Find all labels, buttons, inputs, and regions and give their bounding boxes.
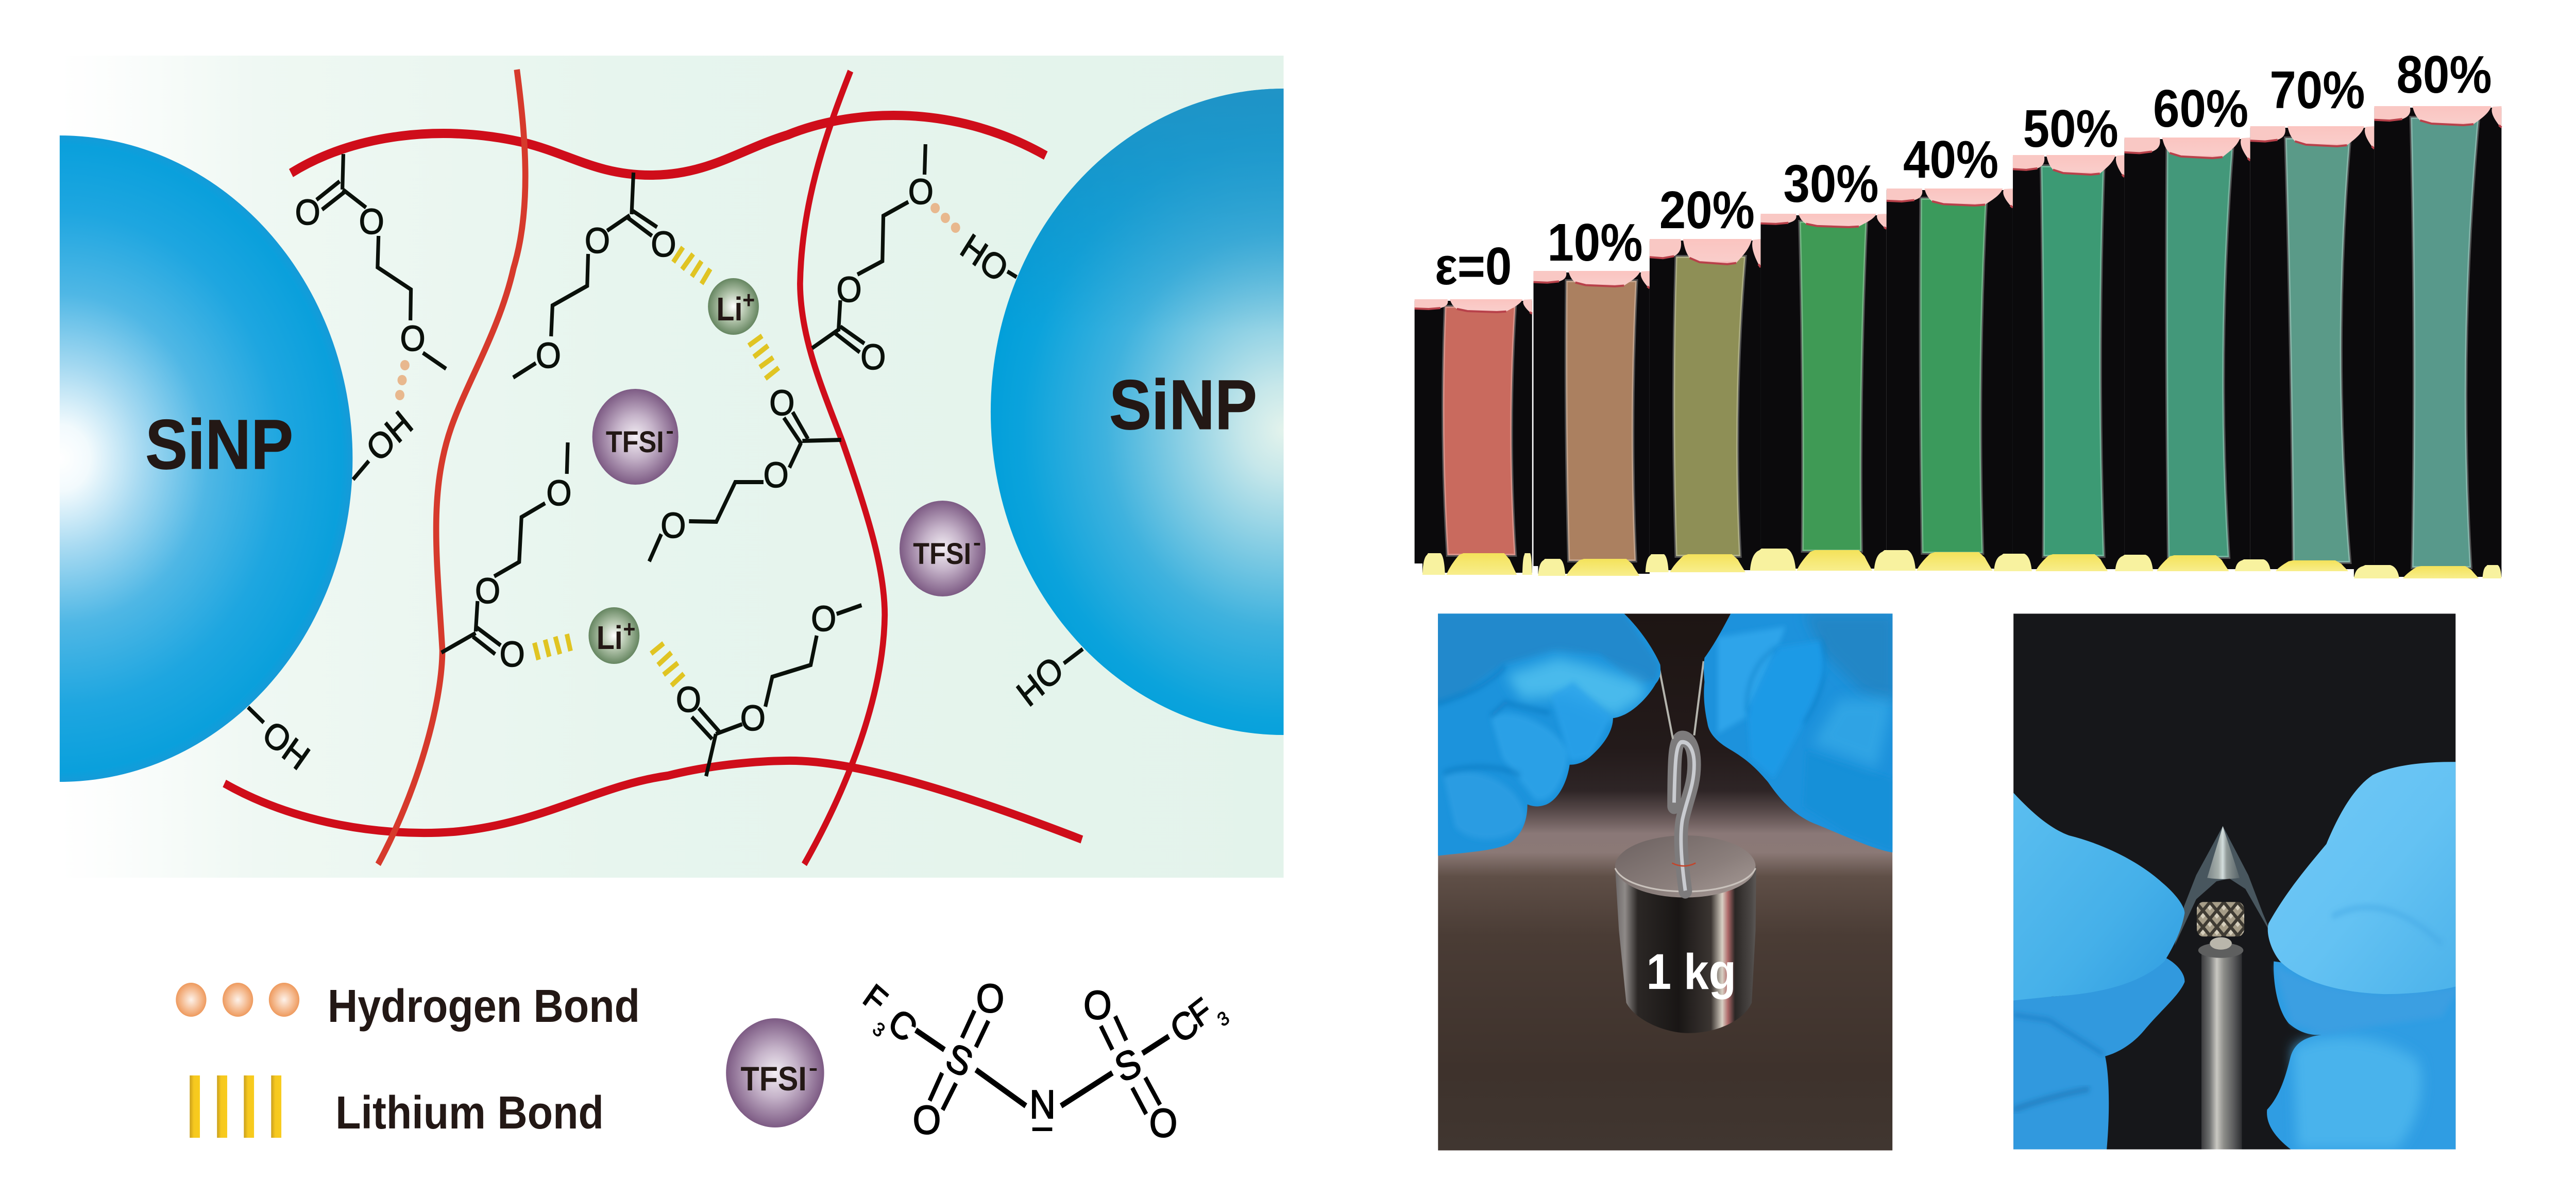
strain label 30%: 30% [1783, 153, 1879, 213]
right glove [1694, 613, 1895, 861]
legend: TFSI- ion [726, 1018, 824, 1127]
Li+ ion lower: Li [597, 619, 623, 656]
left SiNP particle [60, 135, 352, 782]
side chain: right of upper Li: O [769, 383, 794, 423]
Li+ ion lower [588, 607, 639, 664]
side chain: lower right [676, 599, 861, 776]
side chain: lower right: O [676, 680, 701, 720]
left SiNP particle: SiNP [145, 405, 293, 484]
strip 40% [1874, 189, 2013, 571]
TFSI chemical structure: O [976, 976, 1004, 1021]
TFSI- ion right: TFSI [913, 537, 971, 571]
right SiNP particle: SiNP [1109, 365, 1257, 444]
TFSI- ion right [900, 501, 986, 596]
side chain: lower left: O [500, 635, 525, 675]
Li+ ion lower: + [623, 616, 636, 643]
legend: hydrogen bond: Hydrogen Bond [328, 981, 640, 1032]
TFSI chemical structure: C [881, 1000, 924, 1050]
hydroxyl group lower left: OH [256, 713, 316, 778]
photo: film wrapping a sharp metal tip [2008, 613, 2460, 1151]
side chain: top centre [513, 173, 676, 378]
strain label 80%: 80% [2396, 44, 2492, 104]
TFSI chemical structure: 3 [1213, 1006, 1233, 1031]
legend: hydrogen bond [176, 981, 640, 1032]
TFSI chemical structure: O [913, 1098, 941, 1142]
strip 20% [1646, 239, 1760, 572]
side chain: lower left: O [547, 473, 571, 514]
Li+ ion upper: Li [716, 290, 742, 328]
side chain: right of upper Li: O [660, 506, 686, 546]
strain label 60%: 60% [2153, 78, 2248, 138]
TFSI chemical structure: F [1182, 990, 1218, 1035]
side chain: top left with hydrogen bond: OH [360, 403, 420, 469]
strip 60% [2115, 138, 2250, 571]
photo: film holding 1 kg weight [1434, 613, 1895, 1151]
TFSI- ion centre [592, 389, 679, 485]
side chain: lower left [442, 442, 571, 675]
strip 50% [1994, 155, 2124, 571]
hydroxyl group lower right: HO [1010, 649, 1071, 714]
TFSI chemical structure: S [940, 1034, 979, 1086]
right SiNP particle [991, 89, 1283, 735]
strip 70% [2235, 126, 2374, 571]
strip 30% [1750, 214, 1887, 571]
side chain: right of upper Li [649, 383, 841, 561]
side chain: top right with hydrogen bond: HO [954, 227, 1014, 290]
Li+ ion upper [708, 278, 759, 335]
strain label 70%: 70% [2269, 60, 2365, 119]
side chain: top right with hydrogen bond [812, 144, 1016, 378]
lithium bond hashes: upper [673, 247, 779, 379]
TFSI chemical structure [857, 976, 1233, 1145]
TFSI chemical structure: F [857, 977, 893, 1020]
strip ε=0 [1415, 299, 1532, 575]
weight label: 1 kg [1647, 944, 1736, 1000]
legend: lithium bond: Lithium Bond [335, 1087, 604, 1139]
film strips [1658, 661, 1704, 739]
TFSI chemical structure: N [1029, 1082, 1056, 1127]
TFSI chemical structure: O [1083, 983, 1112, 1028]
TFSI chemical structure: 3 [869, 1017, 889, 1041]
photo background [2013, 613, 2455, 1150]
side chain: lower left: O [475, 571, 500, 611]
side chain: right of upper Li: O [764, 455, 789, 495]
TFSI- ion centre: TFSI [606, 425, 664, 459]
panel background [60, 56, 1283, 878]
left glove [1434, 613, 1671, 861]
side chain: top left with hydrogen bond [295, 154, 446, 480]
strain label 20%: 20% [1659, 180, 1755, 240]
panel: strain colour photo strip [1415, 44, 2501, 578]
side chain: top left with hydrogen bond: O [295, 193, 320, 233]
side chain: top centre: O [585, 221, 610, 261]
strain label 10%: 10% [1547, 212, 1642, 272]
side chain: top left with hydrogen bond: O [400, 319, 426, 359]
1 kg weight cylinder [1615, 835, 1756, 1033]
Li+ ion upper: + [742, 287, 755, 314]
strip 10% [1533, 271, 1650, 576]
side chain: top right with hydrogen bond: O [837, 270, 862, 310]
side chain: top right with hydrogen bond: O [908, 172, 934, 212]
right gloved fingers [2267, 762, 2460, 1151]
legend: lithium bond [190, 1075, 604, 1139]
side chain: top right with hydrogen bond: O [860, 337, 886, 378]
TFSI chemical structure: C [1163, 1001, 1206, 1052]
left gloved fingers [2008, 787, 2184, 1151]
strain label 50%: 50% [2023, 98, 2119, 158]
side chain: top centre: O [536, 336, 561, 376]
metal hook [1672, 739, 1696, 891]
legend: TFSI- ion: TFSI [740, 1060, 807, 1098]
strain label ε=0: ε=0 [1435, 236, 1512, 296]
lithium bond hashes: lower [534, 634, 684, 686]
metal rod [2198, 937, 2243, 1151]
strain label 40%: 40% [1903, 129, 1998, 189]
sharp cone tip [2207, 826, 2240, 879]
side chain: top centre: O [651, 225, 676, 265]
strip 80% [2354, 106, 2501, 578]
transparent film [2175, 826, 2281, 958]
knurled head [2197, 902, 2244, 936]
red polymer chains [225, 70, 1082, 864]
TFSI chemical structure: S [1109, 1039, 1147, 1091]
panel: polymer network schematic [60, 56, 1283, 878]
photo background [1438, 613, 1892, 1151]
TFSI chemical structure: O [1149, 1101, 1177, 1145]
side chain: top left with hydrogen bond: O [359, 202, 384, 242]
side chain: lower right: O [811, 599, 836, 639]
side chain: lower right: O [740, 698, 766, 739]
